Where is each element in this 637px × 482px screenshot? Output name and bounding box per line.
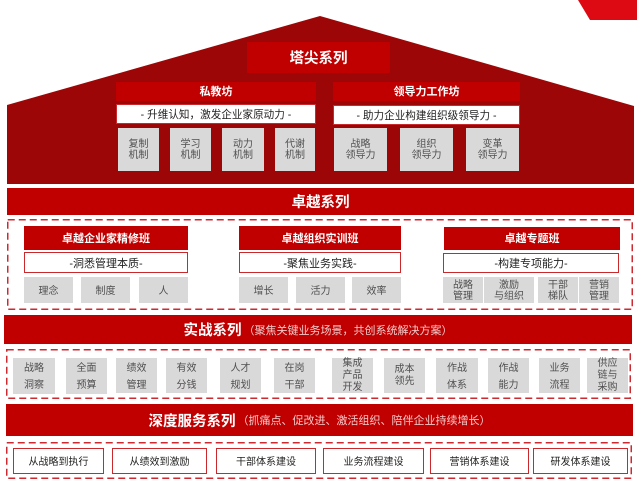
pyramid roof background [7, 16, 634, 184]
item: 有效分钱: 分钱 [176, 380, 196, 390]
item: 集成产品开发: 产品 [342, 370, 362, 381]
heading: 领导力工作坊 [333, 82, 520, 101]
item: 作战能力: 作战 [498, 362, 518, 374]
item: 效率 [352, 277, 401, 303]
item: 研发体系建设: 研发体系建设 [550, 457, 610, 468]
item: 复制机制: 机制 [128, 150, 148, 161]
item: 活力: 活力 [310, 286, 330, 297]
item: 供应链与采购: 供应 [598, 358, 618, 369]
heading bar: 卓越系列: 卓越系列 [292, 195, 350, 211]
tagline: -洞悉管理本质- [69, 258, 143, 270]
item: 激励与组织: 激励 [499, 280, 519, 290]
heading bar: 实战系列 [4, 315, 632, 344]
tagline: -聚焦业务实践- [283, 258, 357, 270]
item: 人 [139, 277, 188, 303]
item: 人才规划: 规划 [230, 380, 250, 390]
item: 战略洞察 [13, 358, 55, 394]
tagline: -构建专项能力- [494, 258, 568, 270]
item: 学习机制 [170, 128, 211, 171]
tagline [333, 105, 520, 125]
item: 在岗干部 [274, 358, 315, 393]
item: 绩效管理 [116, 358, 157, 393]
item: 制度: 制度 [96, 286, 116, 297]
item: 理念 [24, 277, 73, 303]
item: 学习机制: 机制 [180, 150, 200, 161]
item: 业务流程: 流程 [550, 380, 570, 390]
heading bar: 实战系列: （聚焦关键业务场景，共创系统解决方案） [244, 324, 452, 336]
item: 人才规划: 人才 [230, 362, 250, 374]
tagline: - 升维认知，激发企业家原动力 - [141, 108, 291, 120]
item: 干部梯队 [538, 277, 578, 303]
item: 有效分钱: 有效 [176, 362, 196, 374]
item: 干部梯队: 梯队 [548, 290, 568, 302]
course heading: 卓越专题班 [444, 227, 620, 250]
item: 成本领先 [384, 358, 425, 393]
item: 变革领导力: 领导力 [478, 150, 508, 161]
heading bar: 卓越系列 [7, 188, 634, 215]
item: 营销管理: 管理 [589, 290, 609, 302]
item: 供应链与采购: 采购 [598, 382, 618, 393]
panel: 实战系列 topics [6, 349, 631, 399]
tagline [239, 252, 401, 273]
item: 战略领导力: 战略 [350, 139, 370, 150]
item: 研发体系建设 [533, 448, 628, 474]
item: 作战体系: 体系 [447, 380, 467, 390]
item: 动力机制 [222, 128, 264, 171]
panel: 深度服务 topics [6, 442, 632, 479]
item: 从绩效到激励: 从绩效到激励 [130, 457, 190, 468]
tagline: - 助力企业构建组织级领导力 - [356, 110, 497, 122]
item: 集成产品开发: 集成 [342, 358, 362, 369]
item: 成本领先: 成本 [394, 364, 414, 375]
course heading: 卓越企业家精修班: 卓越企业家精修班 [62, 232, 150, 244]
item: 营销体系建设 [430, 448, 529, 474]
heading: 塔尖系列: 塔尖系列 [290, 51, 348, 67]
course heading: 卓越组织实训班 [239, 226, 401, 250]
item: 在岗干部: 干部 [284, 380, 304, 390]
item: 供应链与采购 [587, 358, 628, 393]
item: 营销体系建设: 营销体系建设 [450, 457, 510, 468]
item: 作战能力: 能力 [498, 380, 518, 390]
heading: 塔尖系列 [247, 42, 390, 73]
item: 人才规划 [220, 358, 261, 393]
item: 战略管理 [443, 277, 483, 303]
panel: 领导力工作坊 [333, 82, 520, 171]
item: 动力机制: 机制 [233, 150, 253, 161]
tagline [24, 252, 188, 273]
item: 制度 [81, 277, 130, 303]
item: 学习机制: 学习 [180, 139, 200, 150]
item: 全面预算: 预算 [76, 380, 96, 391]
item: 复制机制 [118, 128, 159, 171]
item: 在岗干部: 在岗 [284, 362, 304, 374]
item: 从战略到执行 [13, 448, 104, 474]
item: 激励与组织: 与组织 [494, 290, 524, 302]
item: 业务流程: 业务 [550, 362, 570, 374]
item: 全面预算: 全面 [76, 363, 96, 374]
item: 供应链与采购: 链与 [598, 370, 618, 381]
item: 业务流程建设 [323, 448, 424, 474]
panel: 卓越系列 courses [7, 219, 633, 310]
item: 动力机制: 动力 [233, 139, 253, 150]
item: 干部体系建设: 干部体系建设 [236, 457, 296, 468]
item: 战略洞察: 洞察 [24, 380, 44, 391]
heading: 领导力工作坊: 领导力工作坊 [394, 86, 460, 98]
item: 战略管理: 战略 [453, 280, 473, 290]
item: 业务流程建设: 业务流程建设 [344, 457, 404, 468]
heading bar: 深度服务系列: 深度服务系列 [148, 414, 236, 430]
item: 变革领导力 [466, 128, 519, 171]
panel: 私教坊 [116, 82, 316, 171]
item: 干部体系建设 [216, 448, 316, 474]
item: 干部梯队: 干部 [548, 280, 568, 290]
item: 绩效管理: 绩效 [126, 362, 146, 374]
item: 绩效管理: 管理 [126, 380, 146, 390]
item: 组织领导力 [400, 128, 453, 171]
item: 业务流程 [539, 358, 580, 393]
item: 作战体系: 作战 [447, 362, 467, 374]
item: 集成产品开发 [332, 358, 373, 393]
item: 增长: 增长 [254, 286, 274, 297]
heading bar: 实战系列: 实战系列 [184, 323, 242, 339]
item: 集成产品开发: 开发 [342, 382, 362, 393]
item: 从战略到执行: 从战略到执行 [28, 457, 88, 468]
course heading: 卓越企业家精修班 [24, 226, 188, 250]
heading bar: 深度服务系列: （抓痛点、促改进、激活组织、陪伴企业持续增长） [238, 415, 490, 427]
heading bar: 深度服务系列 [6, 404, 633, 436]
item: 复制机制: 复制 [128, 139, 148, 150]
item: 战略洞察: 战略 [24, 363, 44, 374]
heading: 私教坊: 私教坊 [200, 86, 232, 98]
item: 作战能力 [488, 358, 529, 393]
item: 变革领导力: 变革 [482, 139, 502, 150]
item: 增长 [239, 277, 288, 303]
item: 成本领先: 领先 [394, 376, 414, 387]
item: 代谢机制 [275, 128, 315, 171]
item: 全面预算 [66, 358, 107, 394]
course heading: 卓越专题班: 卓越专题班 [504, 233, 560, 245]
item: 激励与组织 [484, 277, 534, 303]
tagline [116, 104, 316, 124]
item: 战略领导力: 领导力 [346, 150, 376, 161]
heading: 私教坊 [116, 82, 316, 101]
course heading: 卓越组织实训班: 卓越组织实训班 [282, 232, 358, 244]
tagline [443, 253, 619, 273]
item: 营销管理 [579, 277, 619, 303]
item: 组织领导力: 组织 [416, 139, 436, 150]
item: 组织领导力: 领导力 [412, 150, 442, 161]
item: 战略领导力 [334, 128, 387, 171]
item: 活力 [296, 277, 345, 303]
item: 作战体系 [436, 358, 478, 393]
item: 理念: 理念 [38, 286, 58, 297]
item: 人: 人 [158, 286, 168, 297]
item: 有效分钱 [166, 358, 207, 393]
item: 效率: 效率 [366, 286, 386, 297]
item: 营销管理: 营销 [589, 280, 609, 290]
item: 战略管理: 管理 [453, 290, 473, 302]
item: 代谢机制: 代谢 [285, 139, 305, 150]
item: 从绩效到激励 [112, 448, 207, 474]
item: 代谢机制: 机制 [285, 150, 305, 161]
